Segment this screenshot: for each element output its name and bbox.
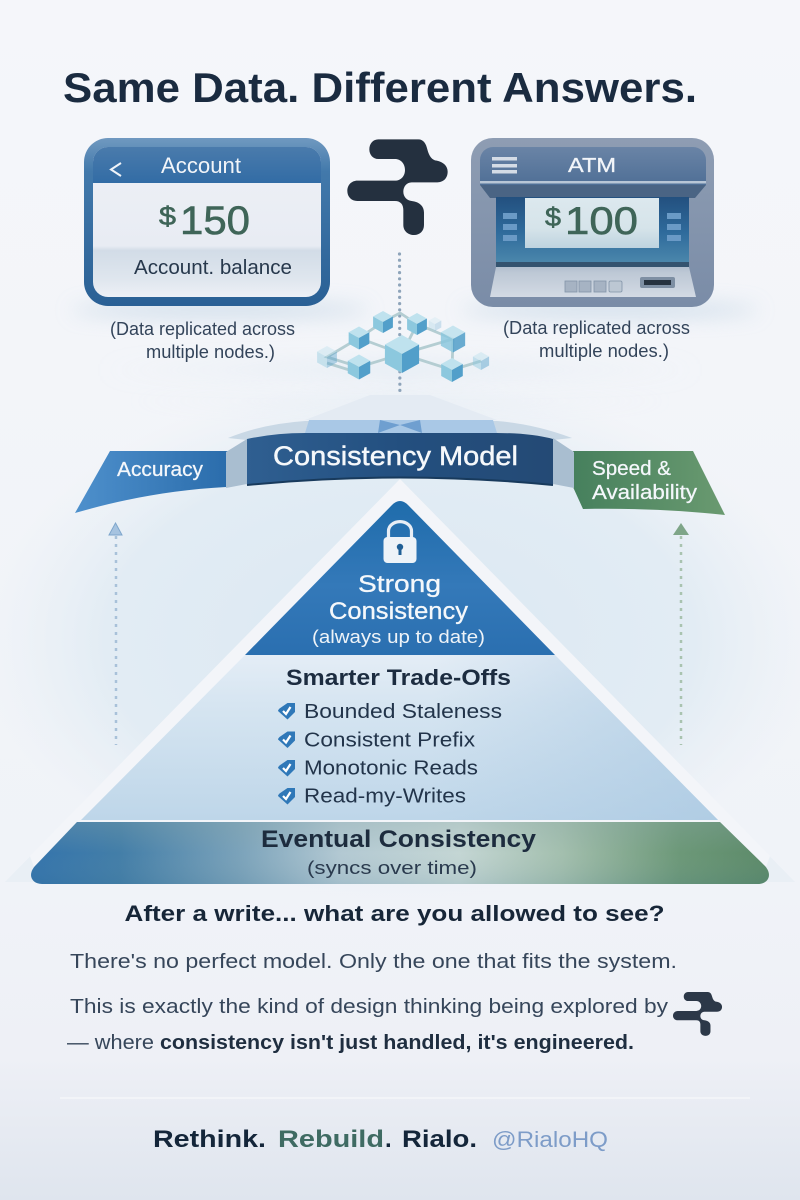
panel: Accuracy <box>75 451 230 513</box>
question heading: After a write... what are you allowed to see? <box>124 901 664 926</box>
footer tagline <box>153 1126 477 1153</box>
tier: strong consistency <box>245 501 555 655</box>
banner title: Consistency Model <box>273 441 518 471</box>
arrow: accuracy <box>109 523 122 745</box>
ATM lower panel <box>490 262 696 297</box>
icon: check 2 <box>278 732 295 748</box>
icon: check 4 <box>278 788 295 804</box>
ATM screen <box>525 198 659 248</box>
note: account replication: multiple nodes.) <box>146 342 275 362</box>
tier: smarter trade-offs <box>81 655 718 820</box>
panel: model stand <box>228 395 572 440</box>
icon: back chevron <box>111 163 121 176</box>
ATM screen well <box>496 197 689 262</box>
body text: design thinking: This is exactly the kind of design thinking being explored by <box>70 995 669 1018</box>
ATM amount: $ <box>545 202 562 232</box>
note: ATM replication: multiple nodes.) <box>539 341 669 361</box>
icon: ATM menu <box>492 157 517 174</box>
ATM header: ATM <box>568 155 616 177</box>
eventual label: Eventual Consistency <box>261 826 537 853</box>
tier: eventual consistency <box>31 822 769 884</box>
body text: no perfect model: There's no perfect model. Only the one that fits the system. <box>70 950 677 973</box>
strong label <box>329 571 468 625</box>
icon: Rialo logo <box>347 139 448 235</box>
account balance label: Account. balance <box>134 256 292 279</box>
pyramid frame <box>5 479 795 884</box>
note: account replication <box>110 319 295 362</box>
strong caption: (always up to date) <box>312 627 485 647</box>
account amount: 150 <box>180 199 250 243</box>
Accuracy label: Accuracy <box>117 459 203 481</box>
panel: Consistency Model banner <box>226 433 574 488</box>
footer tagline: Rebuild <box>278 1126 384 1153</box>
strong label: Strong <box>358 571 441 598</box>
ATM keypad <box>565 281 622 292</box>
icon: lock <box>384 522 416 563</box>
body text: engineered: consistency isn't just handled, it's engineered. <box>160 1031 634 1054</box>
ATM amount <box>545 200 638 243</box>
footer tagline: . <box>385 1126 392 1153</box>
icon: small Rialo logo <box>673 992 722 1036</box>
connector: dotted line <box>398 254 402 432</box>
Speed label <box>592 458 697 504</box>
item: consistent prefix: Consistent Prefix <box>304 730 475 752</box>
eventual caption: (syncs over time) <box>307 858 477 878</box>
panel: ATM <box>471 138 714 307</box>
trade-offs heading: Smarter Trade-Offs <box>286 665 511 690</box>
panel: account card <box>84 138 330 306</box>
note: account replication: (Data replicated across <box>110 319 295 339</box>
item: read-my-writes: Read-my-Writes <box>304 786 466 808</box>
Speed label: Availability <box>592 482 697 504</box>
account header: Account <box>161 153 242 178</box>
title: Same Data. Different Answers. <box>63 64 697 111</box>
ATM side buttons <box>503 213 681 241</box>
body text: engineered: — where <box>67 1031 154 1054</box>
pyramid <box>5 479 795 884</box>
footer handle: @RialoHQ <box>492 1127 608 1152</box>
strong label: Consistency <box>329 598 468 625</box>
item: monotonic reads: Monotonic Reads <box>304 758 478 780</box>
item: bounded staleness: Bounded Staleness <box>304 701 502 723</box>
ATM amount: 100 <box>565 200 638 243</box>
Speed label: Speed & <box>592 458 672 480</box>
panel: Speed and Availability <box>573 451 725 515</box>
icon: check 3 <box>278 760 295 776</box>
icon: check 1 <box>278 703 295 720</box>
note: ATM replication: (Data replicated across <box>503 318 690 338</box>
note: ATM replication <box>503 318 690 361</box>
network of nodes <box>317 311 489 382</box>
arrow: speed <box>673 523 689 745</box>
ATM card slot <box>640 277 675 288</box>
account amount: $ <box>159 201 177 231</box>
footer tagline: Rethink. <box>153 1126 266 1153</box>
footer tagline: Rialo. <box>402 1126 477 1153</box>
